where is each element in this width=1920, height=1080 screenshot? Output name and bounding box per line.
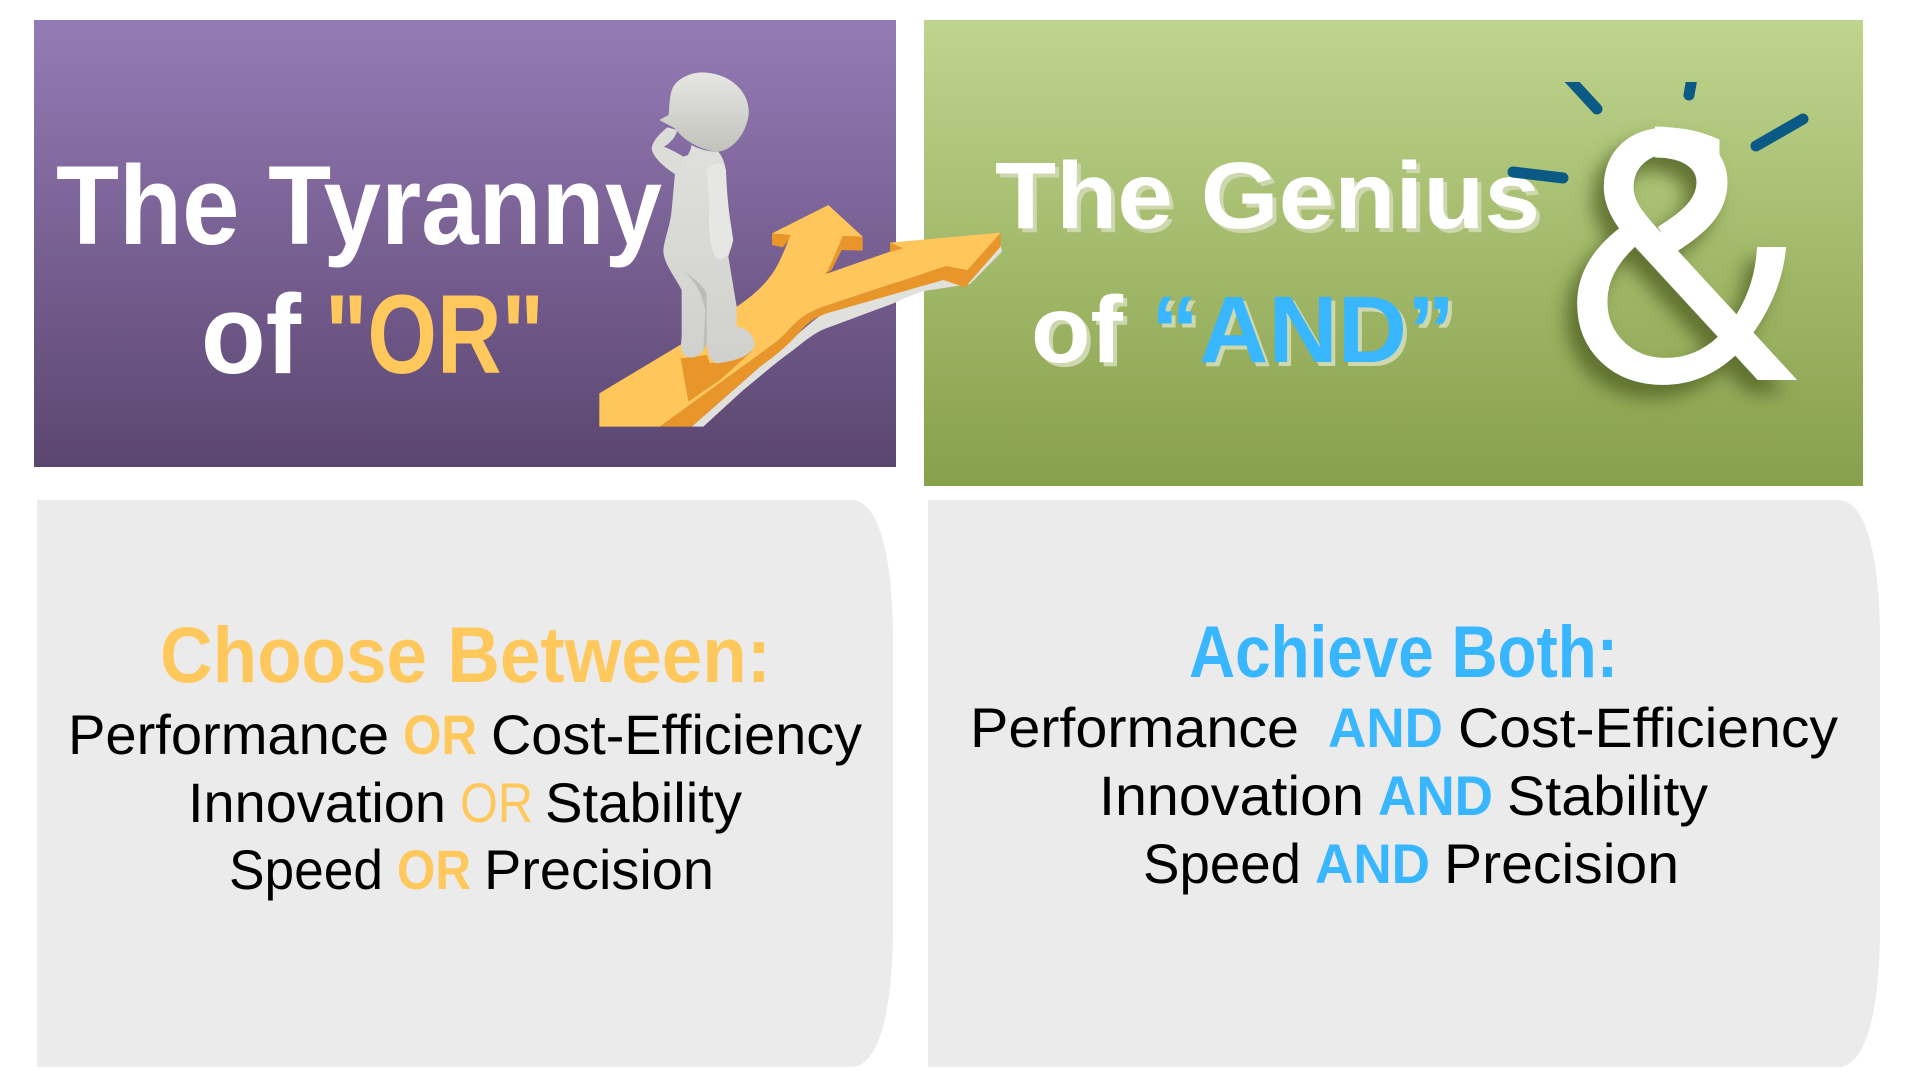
text: Speed OR Precision: Precision xyxy=(484,838,714,901)
text: Innovation OR Stability: OR xyxy=(460,771,533,834)
text: Performance AND Cost-Efficiency: Cost-Efficiency xyxy=(1458,696,1838,759)
text: Innovation AND Stability: Stability xyxy=(1507,764,1708,827)
text: Speed OR Precision: Speed xyxy=(229,838,383,901)
heading: The Tyranny of "OR": of xyxy=(201,272,302,397)
heading: The Genius of "AND": of xyxy=(1031,277,1123,383)
heading: The Genius of "AND": The Genius xyxy=(995,143,1540,249)
panel: Achieve Both card xyxy=(928,500,1880,1067)
text: Innovation AND Stability: Innovation xyxy=(1099,764,1364,827)
heading: The Genius of "AND" xyxy=(995,143,1544,387)
heading: The Tyranny of "OR" xyxy=(56,143,662,397)
text: Speed OR Precision xyxy=(229,838,714,901)
icon: ampersand with spark lines xyxy=(1508,82,1808,408)
text: Innovation AND Stability xyxy=(1099,764,1708,827)
icon: forked road arrow xyxy=(599,205,1002,427)
heading: The Tyranny of "OR": "OR" xyxy=(325,272,544,397)
text: Speed AND Precision: Speed xyxy=(1143,832,1301,895)
heading: Achieve Both: Achieve Both: xyxy=(1189,612,1618,693)
text: Performance OR Cost-Efficiency xyxy=(68,703,862,766)
panel: Genius of AND banner xyxy=(924,20,1863,486)
heading: The Tyranny of "OR": The Tyranny xyxy=(56,143,662,268)
ampersand glyph: & xyxy=(1557,65,1807,461)
text: Innovation AND Stability: AND xyxy=(1378,764,1493,827)
text: Speed AND Precision xyxy=(1143,832,1679,895)
text: Speed OR Precision: OR xyxy=(397,838,471,901)
text: Innovation OR Stability: Stability xyxy=(545,771,742,834)
spark lines xyxy=(1513,71,1803,178)
text: Performance OR Cost-Efficiency: Cost-Efficiency xyxy=(491,703,862,766)
heading: The Genius of "AND": “AND” xyxy=(1151,277,1455,383)
text: Performance AND Cost-Efficiency: Performance xyxy=(970,696,1299,759)
text: Performance OR Cost-Efficiency: Performance xyxy=(68,703,389,766)
text: Speed AND Precision: Precision xyxy=(1444,832,1679,895)
text: Performance AND Cost-Efficiency: AND xyxy=(1328,696,1443,759)
panel: Choose Between card xyxy=(37,500,893,1067)
heading: The Genius of "AND": “AND” xyxy=(1155,281,1459,387)
text: Performance OR Cost-Efficiency: OR xyxy=(403,703,477,766)
heading: The Genius of "AND": of xyxy=(1035,281,1127,387)
text: Performance AND Cost-Efficiency xyxy=(970,696,1838,759)
panel: Tyranny of OR banner xyxy=(34,20,896,467)
text: Innovation OR Stability: Innovation xyxy=(188,771,446,834)
text: Speed AND Precision: AND xyxy=(1315,832,1430,895)
text: Innovation OR Stability xyxy=(188,771,742,834)
heading: Choose Between: Choose Between: xyxy=(160,610,771,699)
heading: The Genius of "AND": The Genius xyxy=(999,147,1544,253)
icon: thinking white figure xyxy=(652,72,754,363)
